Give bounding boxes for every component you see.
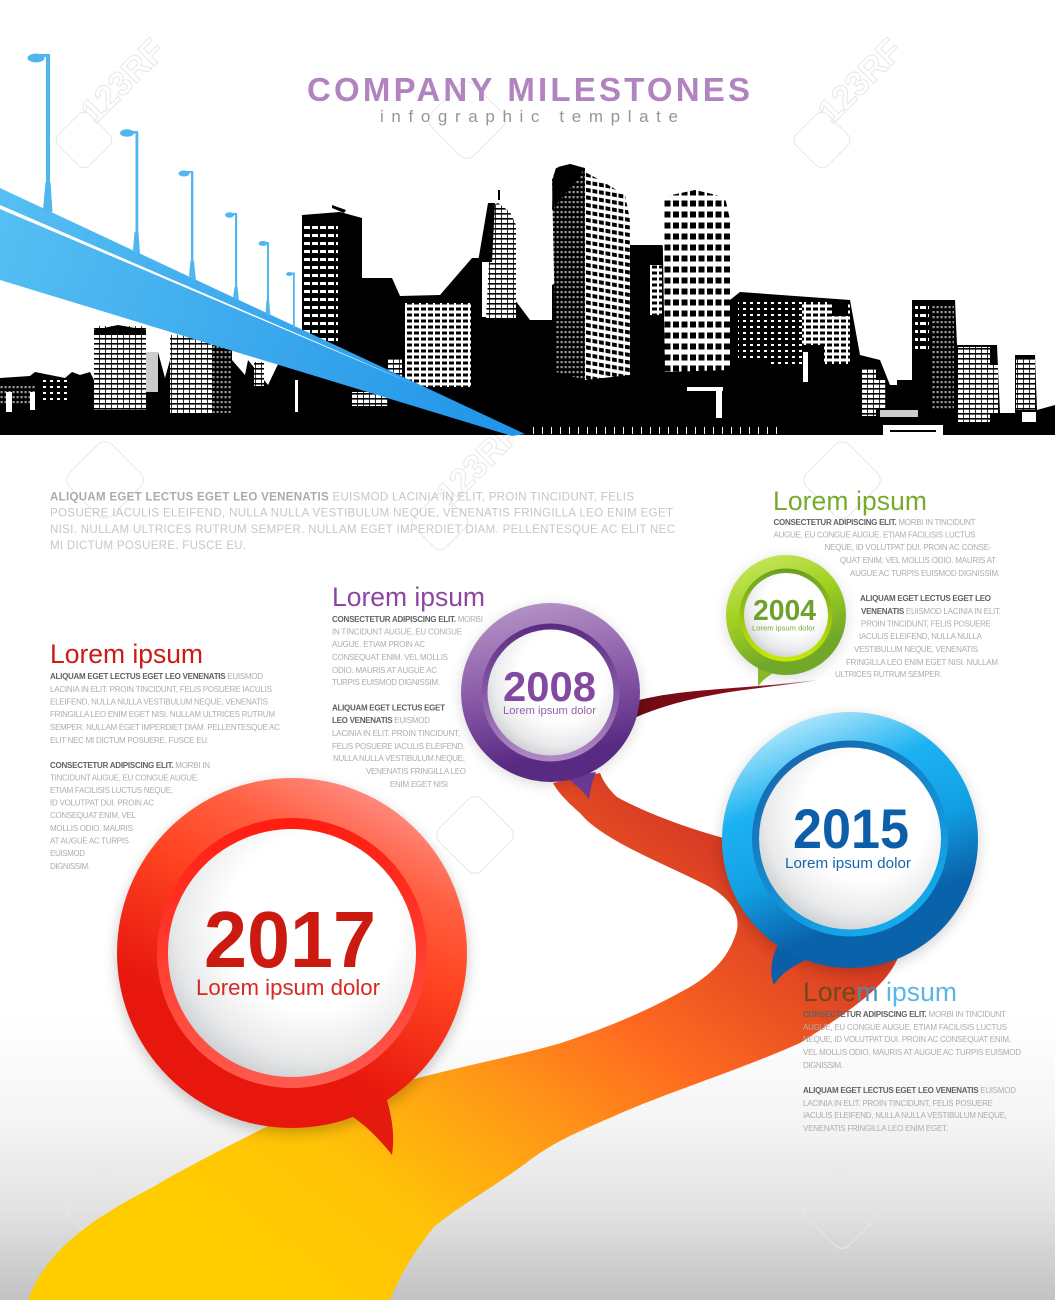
intro paragraph: ALIQUAM EGET LECTUS EGET LEO VENENATIS EUISMOD LACINIA IN ELIT, PROIN TINCIDUNT, FELIS bbox=[50, 492, 634, 504]
title: COMPANY MILESTONES bbox=[307, 71, 750, 108]
intro paragraph bbox=[50, 492, 675, 552]
text block: 2017 red: LACINIA IN ELIT. PROIN TINCIDUNT, FELIS POSUERE IACULIS bbox=[50, 685, 272, 694]
tail bbox=[758, 665, 775, 687]
marker: 2008 bbox=[461, 603, 640, 800]
text block: 2015 blue: IACULIS ELEIFEND, NULLA NULLA VESTIBULUM NEQUE, bbox=[803, 1111, 1007, 1120]
text block: 2017 red: DIGNISSIM. bbox=[50, 862, 90, 871]
text block: 2015 blue: CONSECTETUR ADIPISCING ELIT. MORBI IN TINCIDUNT bbox=[803, 1010, 1006, 1019]
heading: Lorem ipsum bbox=[332, 582, 485, 612]
tail bbox=[350, 1100, 393, 1155]
road white stripe bbox=[0, 205, 418, 386]
text block: 2004 green: CONSECTETUR ADIPISCING ELIT. MORBI IN TINCIDUNT bbox=[774, 518, 976, 527]
ribbon road bbox=[28, 773, 900, 1300]
text block: 2004 green: AUGUE AC TURPIS EUISMOD DIGNISSIM. bbox=[850, 569, 1000, 578]
text block: 2017 red: CONSEQUAT ENIM, VEL bbox=[50, 811, 137, 820]
watermark stamps: 123RF bbox=[811, 32, 910, 131]
text block: 2017 red: MOLLIS ODIO. MAURIS bbox=[50, 824, 133, 833]
heading: Lorem ipsum bbox=[803, 977, 957, 1007]
text block: 2008 purple: FELIS POSUERE IACULIS ELEIFEND, bbox=[332, 742, 465, 751]
text block: 2017 red: AT AUGUE AC TURPIS bbox=[50, 836, 129, 846]
text block: 2008 purple: TURPIS EUISMOD DIGNISSIM. bbox=[332, 678, 440, 687]
watermark stamps: 123RF bbox=[74, 32, 173, 131]
text block: 2008 purple bbox=[332, 582, 485, 789]
text block: 2004 green: VESTIBULUM NEQUE, VENENATIS bbox=[854, 645, 978, 654]
year: 2017 bbox=[204, 895, 376, 984]
subtitle: infographic template bbox=[380, 107, 678, 126]
heading: Lorem ipsum bbox=[50, 639, 203, 669]
text block: 2008 purple: ENIM EGET NISI bbox=[390, 780, 448, 789]
intro paragraph: MI DICTUM POSUERE. FUSCE EU. bbox=[50, 540, 246, 552]
text block: 2008 purple: ALIQUAM EGET LECTUS EGET bbox=[332, 704, 445, 713]
text block: 2004 green: NEQUE, ID VOLUTPAT DUI. PROIN AC CONSE- bbox=[824, 543, 992, 552]
caption: Lorem ipsum dolor bbox=[785, 855, 911, 872]
year: 2015 bbox=[793, 797, 909, 860]
text block: 2008 purple: VENENATIS FRINGILLA LEO bbox=[366, 767, 466, 776]
city skyline bbox=[0, 164, 1055, 435]
text block: 2015 blue: VEL MOLLIS ODIO. MAURIS AT AUGUE AC TURPIS EUISMOD bbox=[803, 1048, 1021, 1057]
year: 2008 bbox=[503, 663, 596, 710]
text block: 2017 red bbox=[50, 639, 280, 871]
year: 2004 bbox=[753, 595, 816, 627]
text block: 2015 blue: AUGUE, EU CONGUE AUGUE. ETIAM FACILISIS LUCTUS bbox=[803, 1023, 1007, 1032]
text block: 2008 purple: AUGUE. ETIAM PROIN AC bbox=[332, 640, 425, 649]
caption: Lorem ipsum dolor bbox=[752, 624, 815, 632]
text block: 2015 blue: VENENATIS FRINGILLA LEO ENIM EGET. bbox=[803, 1124, 948, 1133]
text block: 2008 purple: LACINIA IN ELIT. PROIN TINCIDUNT, bbox=[332, 729, 460, 738]
text block: 2017 red: FRINGILLA LEO ENIM EGET NISI. NULLAM ULTRICES RUTRUM bbox=[50, 710, 275, 719]
text block: 2004 green: PROIN TINCIDUNT, FELIS POSUERE bbox=[861, 620, 991, 629]
text block: 2017 red: EUISMOD bbox=[50, 849, 85, 858]
ribbon far end bbox=[632, 680, 817, 718]
text block: 2017 red: ALIQUAM EGET LECTUS EGET LEO VENENATIS EUISMOD bbox=[50, 672, 263, 681]
watermark stamps bbox=[53, 32, 910, 1252]
text block: 2017 red: ELIT NEC MI DICTUM POSUERE. FUSCE EU. bbox=[50, 736, 209, 745]
title bbox=[307, 71, 750, 126]
watermark stamps: 123RF bbox=[429, 415, 528, 514]
text block: 2004 green: QUAT ENIM, VEL MOLLIS ODIO. MAURIS AT bbox=[840, 556, 996, 565]
text block: 2008 purple: IN TINCIDUNT AUGUE, EU CONGUE bbox=[332, 628, 462, 637]
text block: 2004 green: AUGUE, EU CONGUE AUGUE. ETIAM FACILISIS LUCTUS bbox=[774, 531, 976, 540]
text block: 2017 red: CONSECTETUR ADIPISCING ELIT. MORBI IN bbox=[50, 761, 210, 770]
text block: 2004 green: ULTRICES RUTRUM SEMPER. bbox=[835, 670, 942, 679]
text block: 2008 purple: NULLA NULLA VESTIBULUM NEQUE, bbox=[333, 754, 465, 763]
marker: 2017 bbox=[117, 778, 467, 1155]
text block: 2004 green: FRINGILLA LEO ENIM EGET NISI. NULLAM bbox=[846, 658, 998, 667]
marker: 2015 bbox=[722, 712, 978, 985]
intro paragraph: POSUERE IACULIS ELEIFEND, NULLA NULLA VESTIBULUM NEQUE, VENENATIS FRINGILLA LEO ENIM EGET bbox=[50, 508, 673, 520]
marker: 2004 bbox=[726, 555, 846, 687]
text block: 2017 red: SEMPER. NULLAM EGET IMPERDIET DIAM. PELLENTESQUE AC bbox=[50, 723, 280, 732]
tail bbox=[771, 945, 810, 985]
intro paragraph: NISI. NULLAM ULTRICES RUTRUM SEMPER. NULLAM EGET IMPERDIET DIAM. PELLENTESQUE AC ELIT NEC bbox=[50, 524, 675, 536]
text block: 2017 red: ETIAM FACILISIS LUCTUS NEQUE, bbox=[50, 786, 173, 795]
text block: 2017 red: ELEIFEND, NULLA NULLA VESTIBULUM NEQUE, VENENATIS bbox=[50, 698, 268, 707]
text block: 2017 red: ID VOLUTPAT DUI. PROIN AC bbox=[50, 798, 154, 808]
bridge road bbox=[0, 188, 525, 436]
text block: 2015 blue: LACINIA IN ELIT. PROIN TINCIDUNT, FELIS POSUERE bbox=[803, 1099, 993, 1108]
text block: 2015 blue: NEQUE, ID VOLUTPAT DUI. PROIN AC CONSEQUAT ENIM, bbox=[803, 1035, 1011, 1044]
street lamps bbox=[28, 54, 295, 328]
text block: 2008 purple: CONSECTETUR ADIPISCING ELIT. MORBI bbox=[332, 615, 483, 624]
tail bbox=[565, 772, 596, 800]
text block: 2004 green: ALIQUAM EGET LECTUS EGET LEO bbox=[860, 594, 991, 603]
text block: 2017 red: TINCIDUNT AUGUE, EU CONGUE AUGUE. bbox=[50, 774, 199, 782]
caption: Lorem ipsum dolor bbox=[503, 705, 596, 717]
text block: 2015 blue bbox=[803, 977, 1021, 1133]
text block: 2008 purple: ODIO. MAURIS AT AUGUE AC bbox=[332, 666, 437, 675]
caption: Lorem ipsum dolor bbox=[196, 975, 381, 1000]
text block: 2008 purple: CONSEQUAT ENIM. VEL MOLLIS bbox=[332, 653, 448, 662]
text block: 2015 blue: ALIQUAM EGET LECTUS EGET LEO VENENATIS EUISMOD bbox=[803, 1086, 1016, 1095]
heading: Lorem ipsum bbox=[773, 486, 927, 516]
text block: 2004 green: VENENATIS EUISMOD LACINIA IN ELIT. bbox=[861, 607, 1001, 616]
text block: 2004 green bbox=[773, 486, 1001, 679]
text block: 2008 purple: LEO VENENATIS EUISMOD bbox=[332, 716, 430, 725]
text block: 2004 green: IACULIS ELEIFEND, NULLA NULLA bbox=[859, 632, 983, 641]
text block: 2015 blue: DIGNISSIM. bbox=[803, 1061, 843, 1070]
